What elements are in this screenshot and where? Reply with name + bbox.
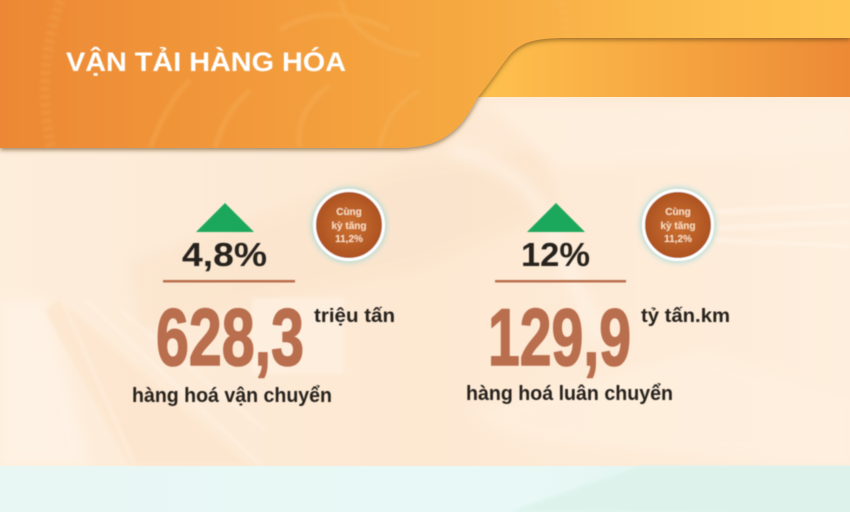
badge: kỳ tăng bbox=[660, 221, 696, 232]
badge: 11,2% bbox=[335, 234, 363, 245]
badge: Cùng bbox=[336, 207, 362, 218]
badge: 11,2% bbox=[664, 234, 692, 245]
caption: hàng hoá vận chuyển bbox=[132, 385, 332, 407]
badge bbox=[314, 190, 384, 260]
background: faded train photo bbox=[0, 90, 850, 470]
percentage: 12% bbox=[521, 236, 590, 273]
bottom teal strip bbox=[0, 466, 850, 512]
big number: 628,3 bbox=[156, 293, 304, 383]
title: VẬN TẢI HÀNG HÓA bbox=[66, 45, 346, 77]
percentage: 4,8% bbox=[182, 236, 267, 273]
icon: up arrow bbox=[196, 203, 254, 232]
icon: up arrow bbox=[527, 203, 585, 232]
badge: Cùng bbox=[665, 207, 691, 218]
badge bbox=[644, 190, 712, 260]
badge: kỳ tăng bbox=[331, 221, 367, 232]
unit: tỷ tấn.km bbox=[641, 306, 730, 327]
secondary header band bbox=[470, 38, 850, 97]
decorative emblem pattern bbox=[44, 2, 418, 147]
divider bbox=[495, 280, 626, 282]
panel: hàng hoá vận chuyển bbox=[132, 190, 395, 407]
main header shape bbox=[0, 0, 850, 148]
big number: 129,9 bbox=[488, 293, 631, 383]
unit: triệu tấn bbox=[314, 306, 395, 327]
caption: hàng hoá luân chuyển bbox=[466, 383, 673, 405]
divider bbox=[163, 280, 295, 282]
panel: hàng hoá luân chuyển bbox=[466, 190, 730, 405]
